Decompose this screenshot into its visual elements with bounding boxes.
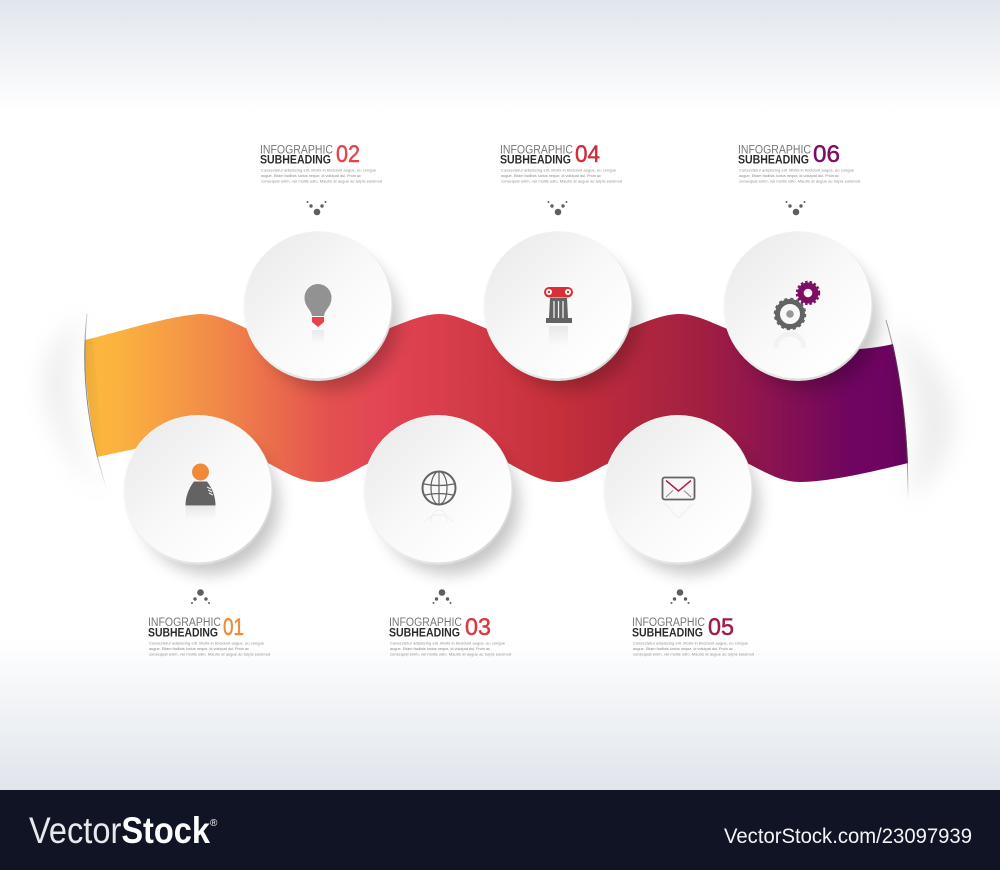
text block 01 [148, 614, 270, 656]
text block 03: INFOGRAPHIC [389, 617, 462, 629]
text block 03: Consectetur adipiscing elit. Morbi in tincidunt augue, eu congue [390, 640, 505, 646]
text block 01: Consectetur adipiscing elit. Morbi in tincidunt augue, eu congue [149, 640, 264, 646]
text block 02: consequat enim, vel mollis odio. Mauris at augue ac turpis euismod [261, 178, 382, 184]
text block 01: augue. Etiam facilisis luctus neque, id volutpat dui. Proin ac [149, 646, 249, 651]
text block 05: Consectetur adipiscing elit. Morbi in tincidunt augue, eu congue [633, 640, 748, 646]
text block 05: INFOGRAPHIC [632, 617, 705, 629]
footer logo: VectorStock [29, 810, 210, 851]
dots pointer 1 [191, 589, 210, 604]
background: bottom fade [0, 640, 1000, 790]
icon: envelope [662, 478, 694, 518]
text block 04: consequat enim, vel mollis odio. Mauris at augue ac turpis euismod [501, 178, 622, 184]
dots pointer 5 [670, 589, 690, 604]
text block 04 [500, 141, 622, 184]
text block 02: augue. Etiam facilisis luctus neque, id volutpat dui. Proin ac [261, 173, 361, 178]
text block 03 [389, 614, 511, 656]
text block 01: consequat enim, vel mollis odio. Mauris at augue ac turpis euismod [149, 652, 270, 656]
step 4 disc [483, 231, 639, 390]
text block 06 [738, 141, 860, 184]
icon: light bulb [304, 284, 332, 344]
left page-curl shadow [44, 316, 106, 496]
text block 06: INFOGRAPHIC [738, 144, 811, 156]
text block 04: augue. Etiam facilisis luctus neque, id volutpat dui. Proin ac [501, 173, 601, 178]
text block 02: 02 [336, 141, 360, 168]
text block 06: SUBHEADING [738, 154, 809, 166]
footer id: VectorStock.com/23097939 [724, 825, 972, 848]
text block 05: augue. Etiam facilisis luctus neque, id volutpat dui. Proin ac [633, 646, 733, 651]
step 3 disc [363, 415, 519, 574]
footer bar [0, 790, 1000, 870]
text block 05: SUBHEADING [632, 628, 703, 640]
text block 04: INFOGRAPHIC [500, 144, 573, 156]
text block 03: augue. Etiam facilisis luctus neque, id volutpat dui. Proin ac [390, 646, 490, 651]
right curled edge line [886, 320, 908, 500]
dots pointer 3 [432, 589, 452, 604]
text block 02: INFOGRAPHIC [260, 144, 333, 156]
ribbon right shading [880, 344, 908, 466]
background: top fade [0, 0, 1000, 112]
text block 02 [260, 141, 382, 184]
text block 01: 01 [223, 614, 244, 641]
text block 01: INFOGRAPHIC [148, 617, 221, 629]
icon: column [544, 287, 573, 346]
text block 06: Consectetur adipiscing elit. Morbi in tincidunt augue, eu congue [739, 168, 854, 172]
dots pointer 6 [786, 201, 806, 215]
text block 05 [632, 614, 754, 656]
text block 06: consequat enim, vel mollis odio. Mauris at augue ac turpis euismod [739, 178, 860, 184]
text block 03: SUBHEADING [389, 628, 460, 640]
dots pointer 4 [548, 201, 568, 215]
dots pointer 2 [306, 201, 326, 215]
icon: globe [422, 472, 456, 522]
text block 05: 05 [708, 614, 734, 641]
text block 06: augue. Etiam facilisis luctus neque, id volutpat dui. Proin ac [739, 173, 839, 178]
text block 03: consequat enim, vel mollis odio. Mauris at augue ac turpis euismod [390, 652, 511, 656]
text block 01: SUBHEADING [148, 628, 218, 640]
step 5 disc [603, 415, 759, 574]
icon: person [186, 464, 216, 520]
text block 04: Consectetur adipiscing elit. Morbi in tincidunt augue, eu congue [501, 168, 616, 172]
step 1 disc [123, 415, 279, 574]
text block 03: 03 [465, 614, 491, 641]
text block 06: 06 [813, 141, 840, 168]
right page-curl shadow [888, 322, 954, 500]
text block 02: Consectetur adipiscing elit. Morbi in tincidunt augue, eu congue [261, 168, 376, 172]
ribbon left shading [85, 338, 103, 457]
wave ribbon [85, 314, 908, 482]
text block 05: consequat enim, vel mollis odio. Mauris at augue ac turpis euismod [633, 652, 754, 656]
text block 04: SUBHEADING [500, 154, 571, 166]
left curled edge line [85, 314, 107, 490]
icon: gears [776, 282, 819, 348]
step 2 disc [243, 231, 399, 390]
text block 04: 04 [575, 141, 600, 168]
footer registered mark: ® [210, 818, 218, 829]
text block 02: SUBHEADING [260, 154, 331, 166]
step 6 disc [723, 231, 879, 390]
